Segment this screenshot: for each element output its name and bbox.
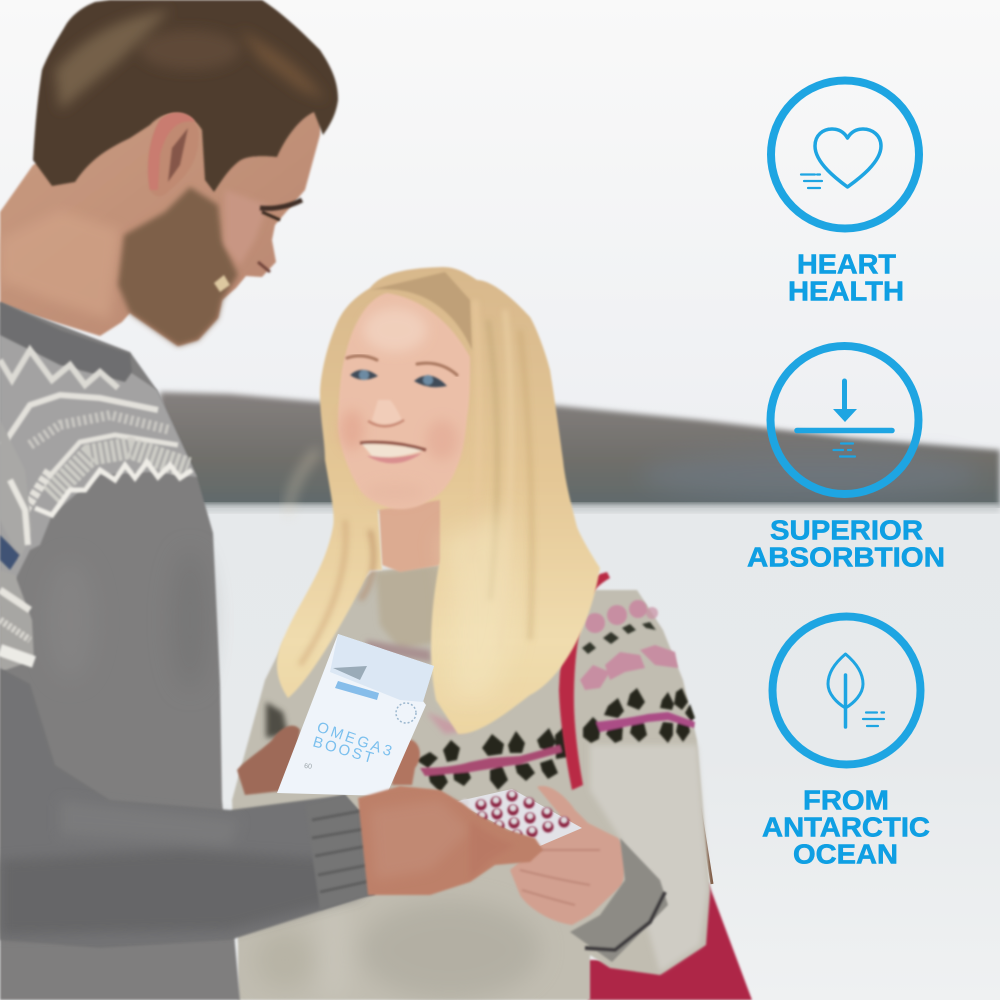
hair lighter tones (55, 10, 325, 110)
man's sweater body (0, 302, 240, 1000)
photo: hands holding Omega3 Boost pack and capsules: 60 (304, 763, 312, 771)
supplement pouch (277, 634, 434, 796)
photo: man in grey sweater (0, 0, 375, 1000)
woman's sleeve cuff (570, 838, 668, 962)
heading: heart health: HEART (797, 248, 896, 280)
red bag strap (559, 572, 610, 790)
pouch label text: OMEGA3 (315, 719, 394, 760)
heading: superior absorbtion: SUPERIOR (770, 514, 923, 546)
blister pack with capsules (447, 789, 582, 846)
yoke pattern (0, 350, 192, 515)
sweater collar (376, 565, 445, 650)
collar (0, 302, 132, 382)
heading: heart health (788, 248, 904, 306)
icon: arrow down to line (770, 346, 918, 494)
sweater sleeve highlight (590, 745, 708, 972)
heading: heart health: HEALTH (788, 276, 904, 306)
icon: leaf in circle (772, 616, 920, 764)
woman's eyes, brows, nose, mouth (347, 356, 457, 463)
woman's sweater (232, 565, 710, 1000)
man's beard stubble (118, 187, 238, 346)
man's sleeve (0, 668, 375, 948)
man's back hand with thumb (237, 726, 300, 795)
heading: from antarctic ocean: OCEAN (793, 838, 898, 870)
hair fringe over forehead (370, 272, 472, 350)
sleeve cuff (305, 795, 375, 910)
benefit: superior absorption (747, 346, 945, 572)
man's eye and mouth (214, 200, 302, 292)
sleeve shading (0, 800, 360, 935)
sweater body mottling (255, 900, 540, 1000)
woman's neck (378, 490, 447, 572)
woman's face (338, 293, 470, 509)
upper sleeve pink and green motifs (580, 600, 678, 690)
left sleeve pattern (0, 420, 34, 672)
photo: hands holding Omega3 Boost pack and capsules (237, 634, 668, 962)
man's cheek (225, 190, 268, 265)
man's ear (148, 113, 199, 196)
face shading (340, 308, 458, 502)
man's hair (33, 0, 338, 192)
woman's hand (510, 786, 625, 925)
heading: superior absorbtion (747, 514, 945, 572)
heading: superior absorbtion: ABSORBTION (747, 542, 945, 572)
photo: woman with blonde hair (232, 267, 752, 1000)
pouch top band (330, 634, 434, 702)
man's fingers behind pouch (392, 740, 420, 785)
body mottling (46, 550, 208, 690)
neck highlight (0, 210, 120, 320)
heading: from antarctic ocean: ANTARCTIC (762, 812, 930, 842)
icon: heart in circle (771, 80, 919, 228)
man's front hand (358, 786, 543, 895)
chest left band and faint pink row (266, 640, 470, 738)
chest diamond band (416, 727, 568, 792)
heading: from antarctic ocean: FROM (803, 784, 889, 816)
benefit: from antarctic ocean (762, 616, 930, 870)
photo: hands holding Omega3 Boost pack and capsules: BOOST (311, 734, 375, 767)
benefit: heart health (771, 80, 919, 306)
hair highlights and streaks (300, 300, 532, 665)
red shoulder bag (588, 882, 752, 1000)
sleeve diamond band (583, 688, 695, 743)
man's neck and face skin (0, 100, 322, 346)
heading: from antarctic ocean (762, 784, 930, 870)
woman's blonde hair (277, 267, 600, 734)
sweater yoke (0, 318, 197, 610)
